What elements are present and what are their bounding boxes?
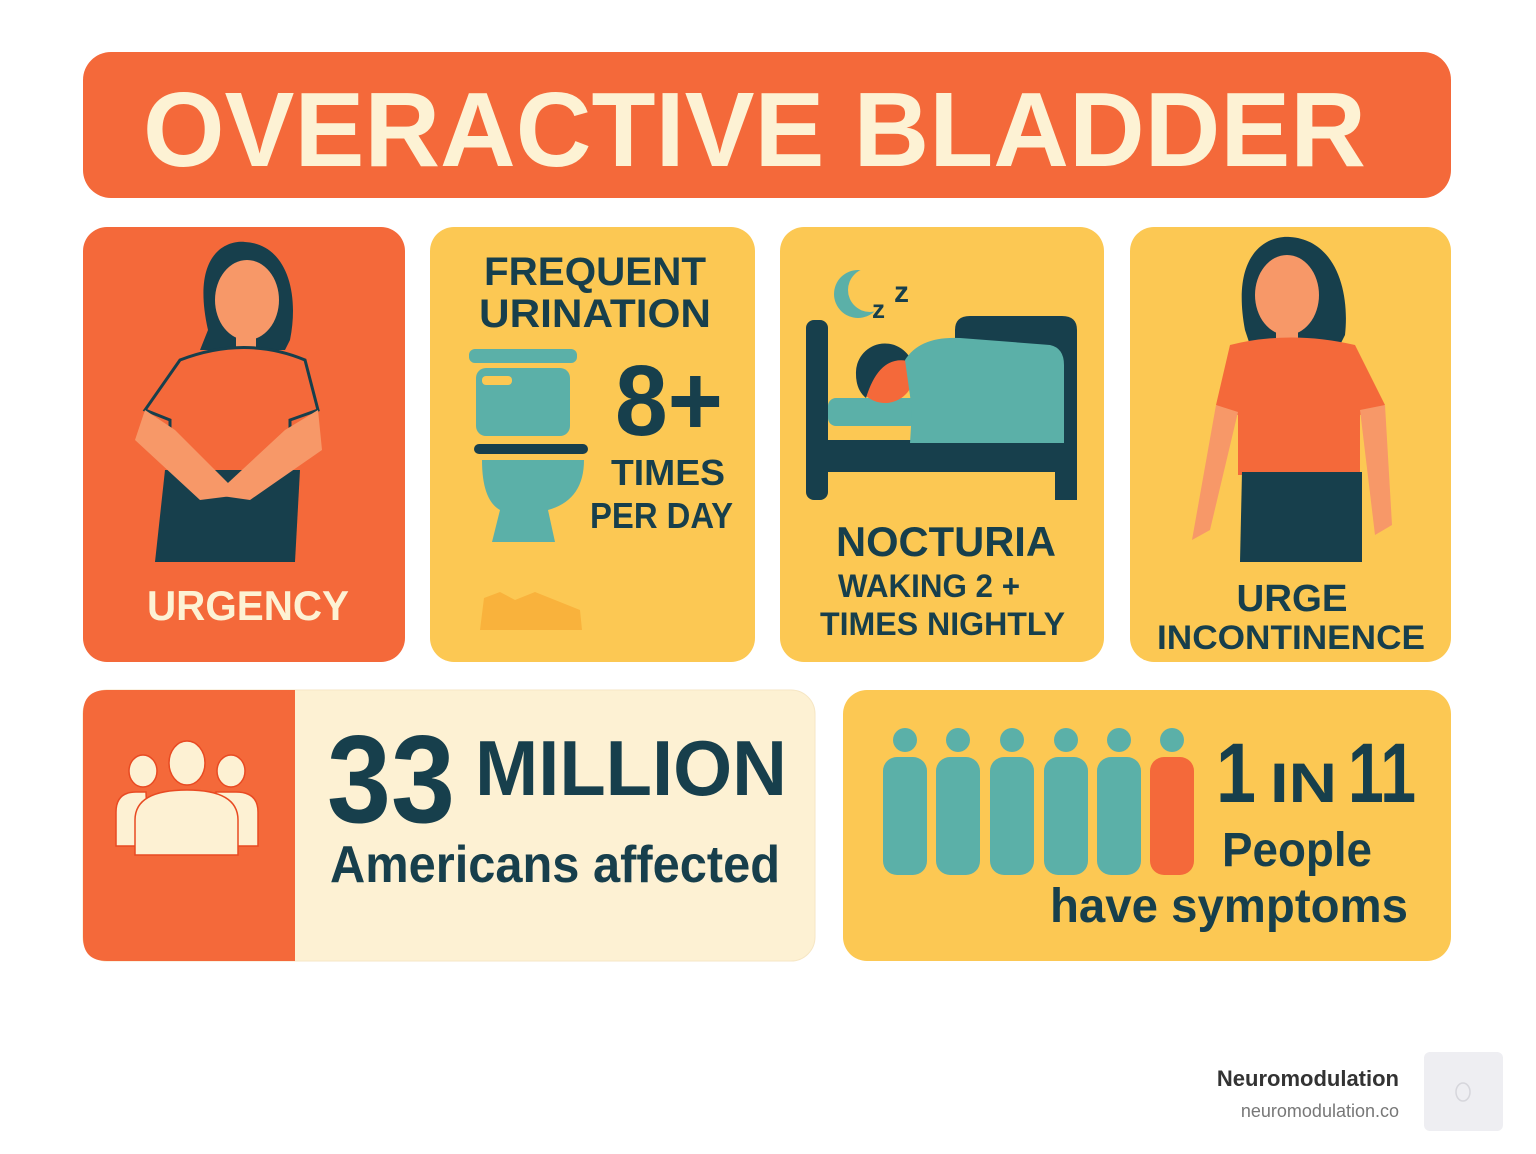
- stat: 1 in 11 people: 11: [1348, 726, 1416, 820]
- stat: 1 in 11 people: have symptoms: [1050, 880, 1408, 933]
- heading: urge incontinence: INCONTINENCE: [1157, 619, 1425, 657]
- icon: woman holding abdomen: [135, 242, 322, 562]
- heading: nocturia: [820, 518, 1065, 642]
- panel: urgency: [83, 227, 405, 662]
- panel: 33 million: [83, 690, 815, 961]
- title: OVERACTIVE BLADDER: [143, 71, 1366, 189]
- panel: nocturia: [780, 227, 1104, 662]
- stat: 8+ times per day: 8+: [615, 345, 723, 457]
- icon: moon and zzz: [834, 270, 908, 318]
- stat: 33 million: Americans affected: [330, 836, 780, 894]
- heading: frequent urination: FREQUENT: [484, 250, 706, 294]
- stat: 1 in 11 people: [1050, 726, 1416, 933]
- icon: standing woman: [1192, 237, 1392, 562]
- footer brand: Neuromodulation: [1217, 1066, 1399, 1091]
- stat: 33 million: MILLION: [475, 724, 787, 812]
- heading: nocturia: WAKING 2 +: [838, 568, 1020, 604]
- icon: six people figures: [883, 728, 1194, 875]
- icon: bed with sleeper: [806, 316, 1077, 500]
- stat: 8+ times per day: PER DAY: [590, 495, 733, 536]
- icon: group of people: [116, 741, 258, 855]
- footer brand: [1217, 1052, 1503, 1131]
- icon: toilet: [469, 349, 588, 542]
- footer brand: neuromodulation.co: [1241, 1101, 1399, 1121]
- panel: frequent urination: [430, 227, 755, 662]
- heading: nocturia: NOCTURIA: [836, 518, 1056, 565]
- heading: urge incontinence: URGE: [1236, 578, 1348, 620]
- heading: frequent urination: [479, 250, 711, 336]
- heading: frequent urination: URINATION: [479, 292, 711, 336]
- stat: 1 in 11 people: 1: [1216, 726, 1256, 820]
- heading: urge incontinence: [1157, 578, 1425, 657]
- stat: 33 million: [327, 711, 787, 894]
- stat: 1 in 11 people: IN: [1270, 751, 1337, 814]
- panel: 1 in 11: [843, 690, 1451, 961]
- label: urgency: URGENCY: [147, 582, 349, 629]
- stat: 8+ times per day: [590, 345, 733, 536]
- panel: urge incontinence: [1130, 227, 1451, 662]
- stat: 33 million: 33: [327, 711, 455, 849]
- stat: 1 in 11 people: People: [1222, 824, 1372, 877]
- heading: nocturia: TIMES NIGHTLY: [820, 606, 1065, 642]
- icon: moon and zzz: z: [872, 294, 885, 324]
- icon: moon and zzz: z: [894, 276, 909, 309]
- stat: 8+ times per day: TIMES: [611, 452, 725, 493]
